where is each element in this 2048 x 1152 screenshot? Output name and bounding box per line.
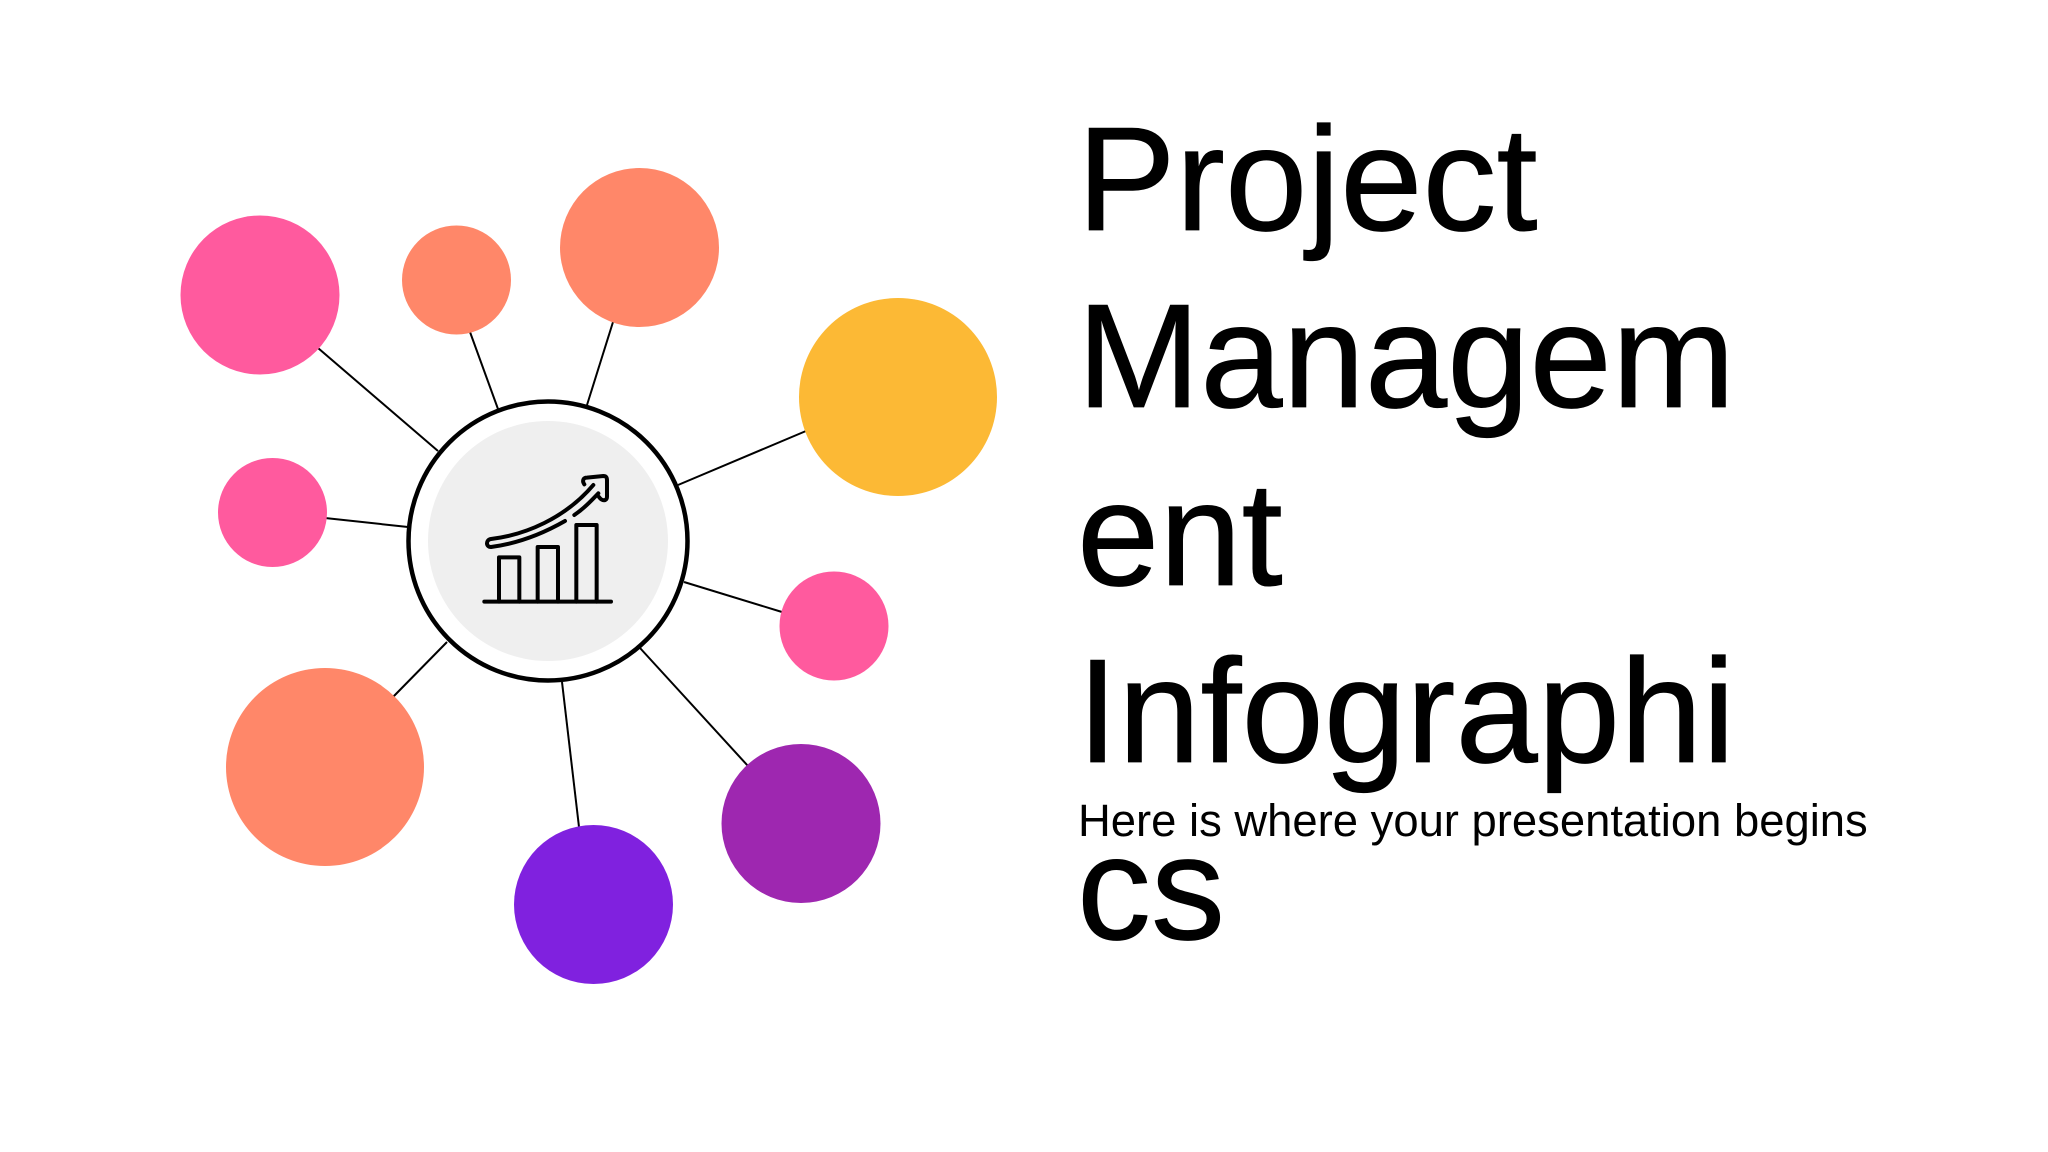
node: pink large — [180, 216, 340, 374]
title: Managem — [1077, 274, 1735, 439]
title — [1077, 97, 1735, 971]
title: cs — [1077, 806, 1225, 971]
node: pink small left — [218, 458, 327, 567]
node: coral medium — [560, 168, 719, 327]
node: violet — [514, 825, 673, 984]
title: Project — [1077, 97, 1538, 262]
node: coral large — [226, 668, 424, 866]
icon: growth chart with arrow — [484, 476, 611, 602]
node: coral small — [402, 226, 511, 334]
node: pink small right — [780, 572, 888, 680]
central hub — [408, 402, 688, 680]
title: ent — [1077, 452, 1283, 617]
title: Infographi — [1077, 629, 1735, 794]
subtitle: Here is where your presentation begins — [1078, 795, 1868, 846]
connector lines — [318, 322, 806, 827]
node: yellow — [799, 298, 997, 496]
node: magenta purple — [722, 744, 880, 903]
